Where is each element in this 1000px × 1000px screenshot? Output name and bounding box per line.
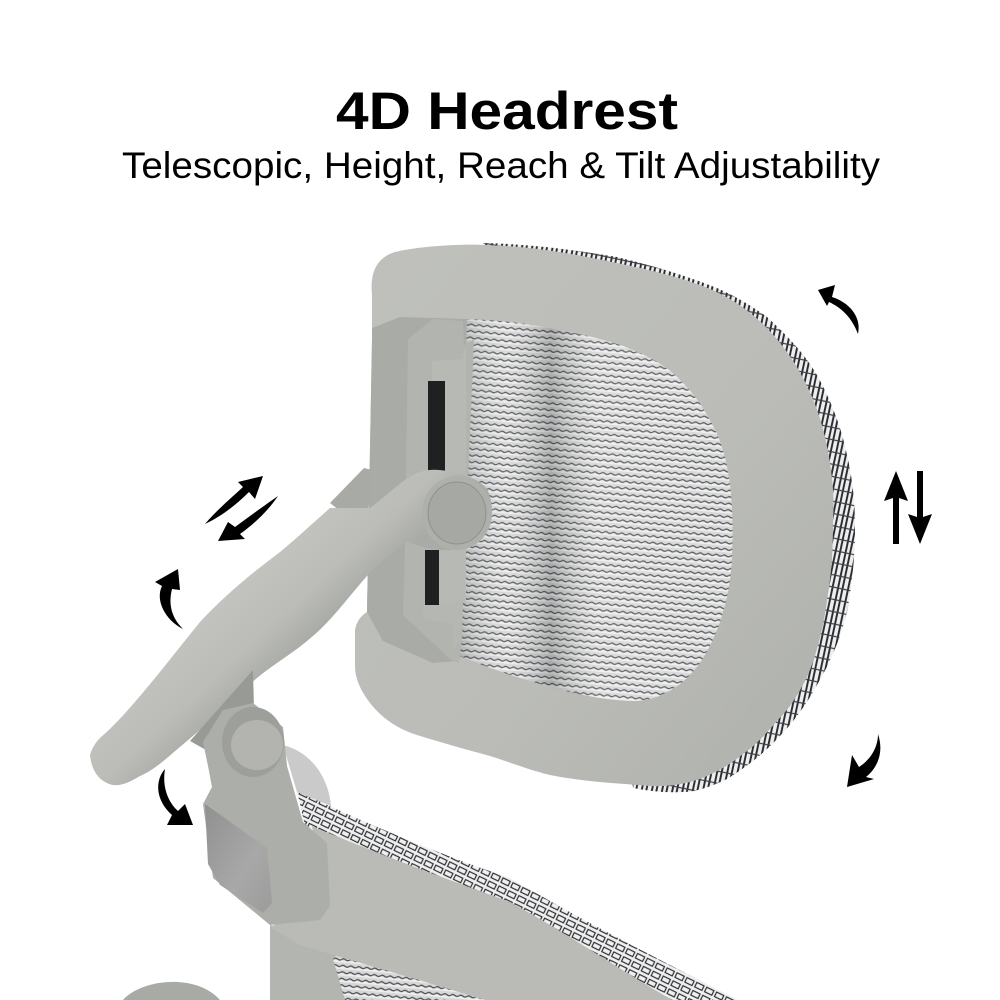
pivot knob [422, 476, 492, 550]
recess wall [367, 317, 467, 663]
lower left roller [123, 982, 220, 1000]
icon: height arrows [884, 471, 932, 544]
icon: rotate arrow top right [818, 285, 859, 334]
mesh outer edge [483, 243, 855, 792]
subtitle: Telescopic, Height, Reach & Tilt Adjustability [122, 145, 881, 186]
icon: reach arrows [205, 476, 278, 541]
icon: rotate arrow bottom left [158, 769, 193, 825]
stem [190, 670, 254, 755]
mesh shading [457, 319, 733, 701]
lower mesh edge [297, 791, 738, 1000]
mesh opening [457, 319, 733, 701]
neck mesh behind bracket [283, 745, 331, 806]
upper slot [428, 381, 445, 471]
lower chair back [270, 791, 738, 1000]
icon: rotate arrow left [155, 569, 183, 629]
title: 4D Headrest [336, 82, 678, 141]
icon: rotate arrow bottom right [847, 734, 880, 787]
lower bracket [190, 670, 330, 925]
headrest [355, 243, 855, 792]
telescopic arm [90, 468, 492, 785]
lower slot [425, 550, 439, 605]
arm back support [330, 468, 372, 515]
lower frame band [270, 826, 672, 1000]
arm body [90, 470, 492, 785]
upper channel [432, 345, 466, 610]
lower notch [423, 600, 463, 648]
knob [222, 707, 284, 777]
frame [355, 245, 834, 786]
seat mesh opening [300, 945, 490, 1000]
bracket plate [403, 319, 474, 663]
bracket body [203, 703, 330, 925]
lower frame vertical strip [270, 925, 345, 1000]
metal plate [205, 804, 272, 913]
